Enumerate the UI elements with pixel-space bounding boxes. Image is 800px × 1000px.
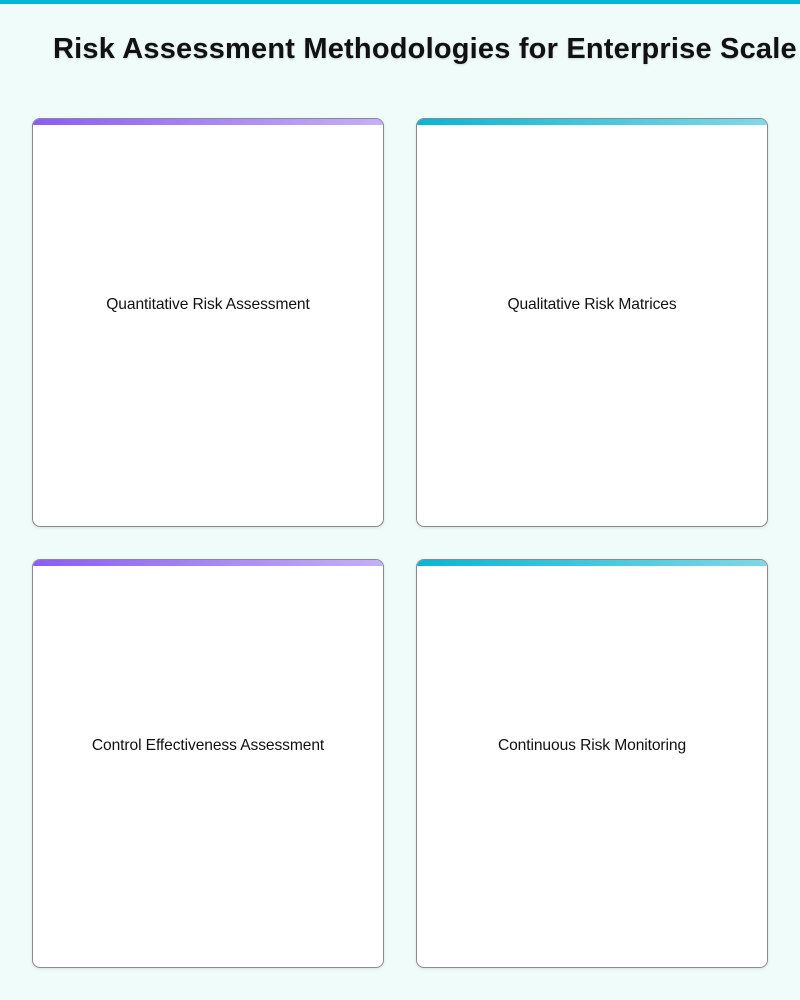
panel: continuous monitoring (416, 559, 768, 968)
panel: control effectiveness (32, 559, 384, 968)
label: continuous monitoring: Continuous Risk Monitoring (498, 737, 686, 754)
label: quantitative: Quantitative Risk Assessment (106, 296, 310, 313)
label: control effectiveness: Control Effectiveness Assessment (92, 737, 324, 754)
panel: qualitative (416, 118, 768, 527)
title: Risk Assessment Methodologies for Enterprise Scale (53, 33, 797, 65)
label: qualitative: Qualitative Risk Matrices (507, 296, 677, 313)
panel: quantitative (32, 118, 384, 527)
